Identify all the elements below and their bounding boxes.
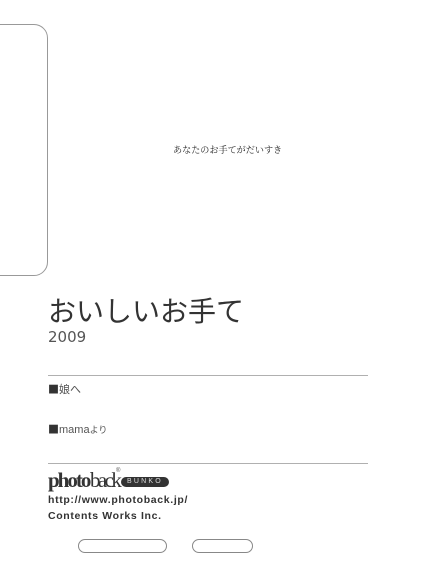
caption: cover text: あなたのお手てがだいすき <box>173 143 282 156</box>
text: signature: ■mamaより <box>48 421 107 437</box>
logo badge: BUNKO: BUNKO <box>127 478 163 485</box>
logo registered mark: ® <box>116 468 120 474</box>
panel: cover image frame <box>0 24 48 276</box>
text: dedication: ■娘へ <box>48 381 81 397</box>
button outline: right <box>192 539 253 553</box>
logo wordmark: back: back <box>90 468 119 492</box>
text: publisher: Contents Works Inc. <box>48 510 162 522</box>
logo wordmark: photo: photo <box>48 468 89 492</box>
logo badge: BUNKO <box>121 477 169 487</box>
logo: photoback bunko <box>48 467 169 492</box>
button outline: left <box>78 539 167 553</box>
text: website url: http://www.photoback.jp/ <box>48 494 188 506</box>
text: year: 2009 <box>48 328 86 346</box>
heading: book title: おいしいお手て <box>48 290 244 330</box>
